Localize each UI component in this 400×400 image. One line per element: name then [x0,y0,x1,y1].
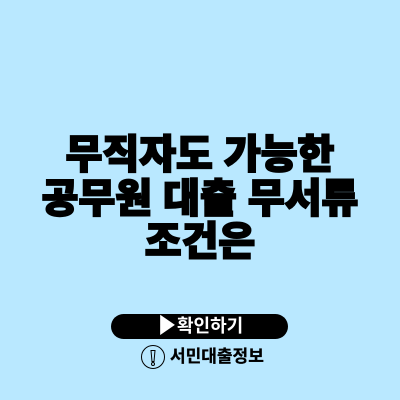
button: confirm [111,314,288,339]
button: confirm: 확인하기 [177,316,243,336]
icon: exclamation in circle [141,345,165,369]
title: 무직자도 가능한 [66,133,334,177]
title: 조건은 [145,220,255,264]
button: confirm: ▶ [158,314,176,338]
title [42,133,358,264]
brand name: 서민대출정보 [170,347,264,366]
title: 공무원 대출 무서류 [42,177,358,221]
